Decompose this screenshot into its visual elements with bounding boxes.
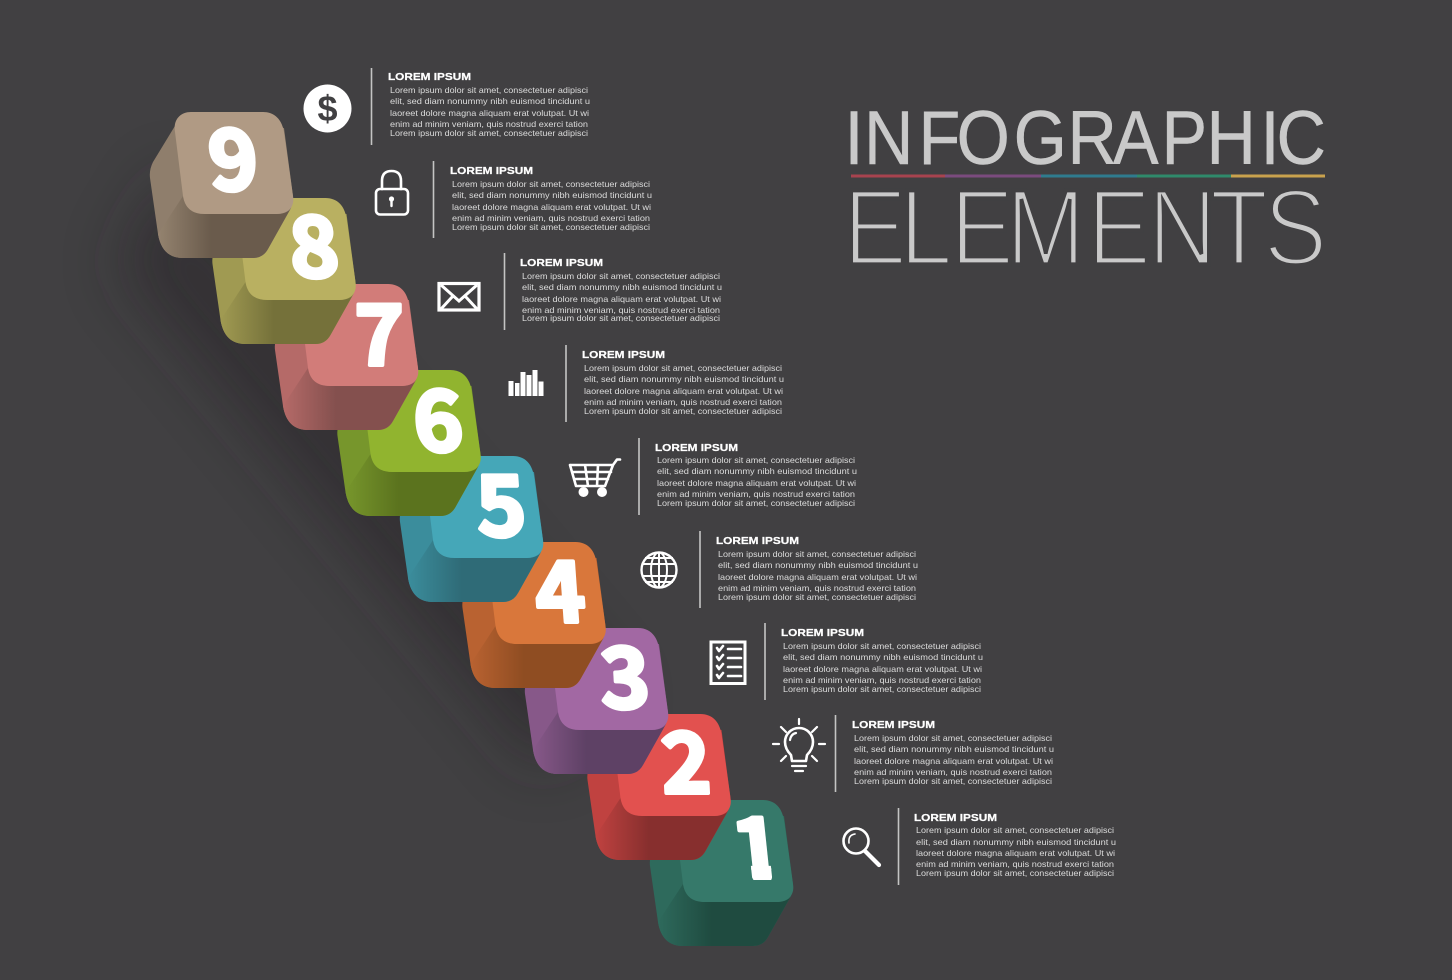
text block 4 [700,531,918,608]
text block 4: LOREM IPSUM [716,536,799,547]
text block 2: LOREM IPSUM [852,720,935,731]
text block 7: enim ad minim veniam, quis nostrud exerci tation [522,305,720,315]
text block 6: Lorem ipsum dolor sit amet, consectetuer adipisci [584,363,782,373]
text block 2: Lorem ipsum dolor sit amet, consectetuer adipisci [854,733,1052,743]
text block 6: LOREM IPSUM [582,350,665,361]
text block 9 [372,68,590,145]
title line: infographic: INFOGRAPHIC [844,97,1326,181]
text block 8: Lorem ipsum dolor sit amet, consectetuer adipisci [452,222,650,232]
text block 1: laoreet dolore magna aliquam erat volutpat. Ut wi [916,848,1115,858]
block 8 [212,180,356,344]
text block 8: enim ad minim veniam, quis nostrud exerci tation [452,213,650,223]
text block 7: laoreet dolore magna aliquam erat volutpat. Ut wi [522,294,721,304]
block 8: 8 [285,180,343,302]
text block 1: elit, sed diam nonummy nibh euismod tincidunt u [916,837,1116,847]
block 1: 1 [725,781,788,903]
block 3: 3 [597,612,653,733]
text block 4: laoreet dolore magna aliquam erat volutpat. Ut wi [718,572,917,582]
icon: dollar coin [304,84,352,132]
block 5: 5 [472,439,530,561]
text block 9: elit, sed diam nonummy nibh euismod tincidunt u [390,96,590,106]
text block 6: laoreet dolore magna aliquam erat volutpat. Ut wi [584,386,783,396]
text block 2: laoreet dolore magna aliquam erat volutpat. Ut wi [854,756,1053,766]
text block 3: Lorem ipsum dolor sit amet, consectetuer adipisci [783,684,981,694]
icon: shopping cart [570,460,620,497]
icon: magnifying glass [844,828,879,865]
text block 8 [434,161,652,238]
icon: padlock [376,171,408,214]
text block 8: Lorem ipsum dolor sit amet, consectetuer adipisci [452,179,650,189]
text block 4: Lorem ipsum dolor sit amet, consectetuer adipisci [718,549,916,559]
block 9 [150,93,293,258]
text block 6 [566,345,784,422]
text block 5: LOREM IPSUM [655,443,738,454]
text block 8: LOREM IPSUM [450,166,533,177]
icon: envelope [439,284,479,310]
text block 9: Lorem ipsum dolor sit amet, consectetuer adipisci [390,85,588,95]
text block 2: enim ad minim veniam, quis nostrud exerci tation [854,767,1052,777]
number blocks staircase [150,93,793,946]
title [843,97,1327,288]
text block 9: Lorem ipsum dolor sit amet, consectetuer adipisci [390,128,588,138]
text block 1 [898,808,1116,885]
text block 3 [765,623,983,700]
text block 7: Lorem ipsum dolor sit amet, consectetuer adipisci [522,313,720,323]
text block 5: Lorem ipsum dolor sit amet, consectetuer adipisci [657,498,855,508]
block 2: 2 [658,697,714,818]
block 7: 7 [354,269,404,390]
block 6 [337,354,481,516]
text block 6: Lorem ipsum dolor sit amet, consectetuer adipisci [584,406,782,416]
text block 2: Lorem ipsum dolor sit amet, consectetuer adipisci [854,776,1052,786]
text block 7: Lorem ipsum dolor sit amet, consectetuer adipisci [522,271,720,281]
text block 2: elit, sed diam nonummy nibh euismod tincidunt u [854,744,1054,754]
text block 1: LOREM IPSUM [914,813,997,824]
block 3 [525,612,668,774]
text block 9: laoreet dolore magna aliquam erat volutpat. Ut wi [390,108,589,118]
text block 2 [836,715,1054,792]
text block 5: elit, sed diam nonummy nibh euismod tincidunt u [657,466,857,476]
text block 7 [504,253,722,330]
icon: light bulb [773,719,825,771]
text block 1: Lorem ipsum dolor sit amet, consectetuer adipisci [916,868,1114,878]
text block 3: enim ad minim veniam, quis nostrud exerci tation [783,675,981,685]
block 1 [650,800,794,946]
text block 5 [639,438,857,515]
block 4: 4 [531,525,589,647]
text block 9: LOREM IPSUM [388,72,471,83]
text block 7: elit, sed diam nonummy nibh euismod tincidunt u [522,282,722,292]
text block 9: enim ad minim veniam, quis nostrud exerci tation [390,119,588,129]
text block 4: elit, sed diam nonummy nibh euismod tincidunt u [718,560,918,570]
block 2 [587,697,731,860]
block 6: 6 [409,354,467,476]
text block 5: Lorem ipsum dolor sit amet, consectetuer adipisci [657,455,855,465]
text block 6: enim ad minim veniam, quis nostrud exerci tation [584,397,782,407]
text block 5: enim ad minim veniam, quis nostrud exerci tation [657,489,855,499]
icon: bar chart [508,370,544,396]
block 9: 9 [204,93,262,215]
title line: elements: ELEMENTS [843,167,1327,288]
icon: globe [642,552,676,588]
block 7 [275,269,418,430]
text block 3: LOREM IPSUM [781,628,864,639]
icon: checklist [711,642,745,684]
staircase drop shadow [118,170,620,770]
text block 3: laoreet dolore magna aliquam erat volutpat. Ut wi [783,664,982,674]
block 4 [462,525,606,688]
block 5 [400,439,543,602]
icon: dollar coin: $ [317,88,338,129]
text block 1: Lorem ipsum dolor sit amet, consectetuer adipisci [916,825,1114,835]
text block 5: laoreet dolore magna aliquam erat volutpat. Ut wi [657,478,856,488]
text block 8: elit, sed diam nonummy nibh euismod tincidunt u [452,190,652,200]
text block 3: elit, sed diam nonummy nibh euismod tincidunt u [783,652,983,662]
text block 6: elit, sed diam nonummy nibh euismod tincidunt u [584,374,784,384]
text block 1: enim ad minim veniam, quis nostrud exerci tation [916,859,1114,869]
text block 3: Lorem ipsum dolor sit amet, consectetuer adipisci [783,641,981,651]
text block 4: enim ad minim veniam, quis nostrud exerci tation [718,583,916,593]
multicolour rule [851,174,1325,178]
text block 8: laoreet dolore magna aliquam erat volutpat. Ut wi [452,202,651,212]
text block 7: LOREM IPSUM [520,258,603,269]
text block 4: Lorem ipsum dolor sit amet, consectetuer adipisci [718,592,916,602]
